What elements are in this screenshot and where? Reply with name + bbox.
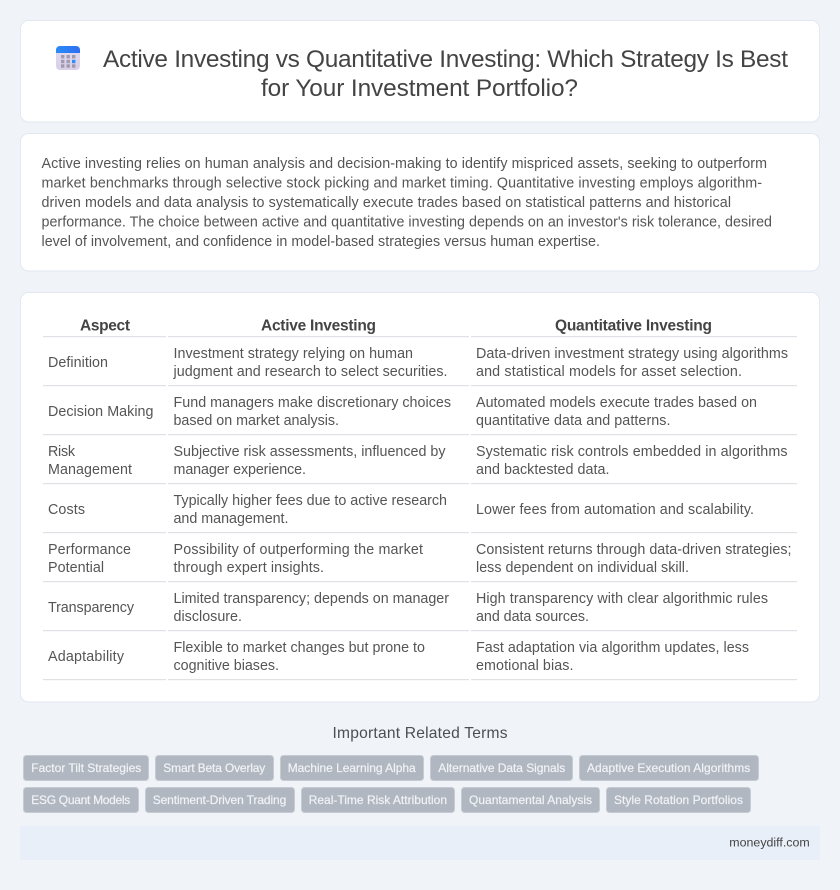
intro text: level of involvement, and confidence in model-based strategies versus human expertise. — [42, 234, 600, 250]
related terms heading: Important Related Terms — [332, 725, 508, 742]
row: decision making — [48, 395, 757, 429]
row: costs — [48, 493, 754, 527]
row: costs: Costs — [48, 502, 85, 518]
row: definition: judgment and research to select securities. — [172, 364, 448, 380]
tag: ESG Quant Models — [24, 788, 138, 812]
title — [103, 46, 788, 102]
table header: Aspect — [80, 318, 130, 334]
row: risk management: Management — [48, 462, 132, 478]
intro text: performance. The choice between active and quantitative investing depends on an investor's risk tolerance, desired — [42, 214, 772, 230]
row: decision making: Fund managers make discretionary choices — [174, 395, 451, 411]
row: performance potential: through expert insights. — [174, 560, 324, 576]
intro text: market benchmarks through selective stock picking and market timing. Quantitative investing employs algorithm- — [42, 176, 762, 192]
footer — [20, 826, 820, 860]
row: transparency: and data sources. — [476, 609, 589, 625]
row: risk management: Systematic risk controls embedded in algorithms — [476, 444, 788, 460]
row: risk management: and backtested data. — [476, 462, 610, 478]
row: costs: Lower fees from automation and scalability. — [476, 502, 754, 518]
row: adaptability: cognitive biases. — [174, 658, 279, 674]
row: adaptability: Flexible to market changes but prone to — [174, 640, 425, 656]
tag: Real-Time Risk Attribution — [302, 788, 454, 812]
table header: Quantitative Investing — [555, 318, 712, 334]
panel: header — [20, 20, 820, 122]
intro text: driven models and data analysis to systematically execute trades based on statistical patterns and historical — [42, 195, 731, 211]
tag: Machine Learning Alpha — [280, 756, 424, 780]
row: performance potential — [48, 542, 792, 576]
row: performance potential: Performance — [48, 542, 131, 558]
tag: Adaptive Execution Algorithms: Adaptive Execution Algorithms — [587, 761, 750, 775]
panel: introduction — [20, 134, 820, 271]
row: adaptability: emotional bias. — [476, 658, 574, 674]
row: transparency — [48, 591, 768, 625]
row: definition: Investment strategy relying on human — [174, 346, 413, 362]
row: risk management: Risk — [48, 444, 76, 460]
row: decision making: Automated models execute trades based on — [476, 395, 757, 411]
row: definition — [48, 346, 788, 380]
intro text: Active investing relies on human analysis and decision-making to identify mispriced assets, seeking to outperform — [42, 156, 767, 172]
title: Active Investing vs Quantitative Investing: Which Strategy Is Best — [103, 46, 788, 73]
row: definition: and statistical models for asset selection. — [476, 364, 742, 380]
row: transparency: Transparency — [48, 600, 135, 616]
row: costs: and management. — [174, 511, 288, 527]
tag: Machine Learning Alpha: Machine Learning Alpha — [288, 761, 416, 775]
row: performance potential: less dependent on individual skill. — [476, 560, 689, 576]
row: performance potential: Potential — [48, 560, 104, 576]
tag: Alternative Data Signals: Alternative Data Signals — [438, 761, 565, 775]
row: adaptability: Adaptability — [48, 649, 125, 665]
tag: Adaptive Execution Algorithms — [580, 756, 758, 780]
row: risk management: manager experience. — [174, 462, 306, 478]
row: decision making: quantitative data and patterns. — [476, 413, 670, 429]
row: transparency: disclosure. — [174, 609, 242, 625]
row: performance potential: Consistent returns through data-driven strategies; — [476, 542, 792, 558]
row: definition: Data-driven investment strategy using algorithms — [476, 346, 788, 362]
row: risk management — [48, 444, 788, 478]
tag: Quantamental Analysis — [462, 788, 600, 812]
table header: Active Investing — [261, 318, 376, 334]
row: performance potential: Possibility of outperforming the market — [174, 542, 423, 558]
tag: Sentiment-Driven Trading — [146, 788, 294, 812]
row: adaptability: Fast adaptation via algorithm updates, less — [476, 640, 749, 656]
intro text — [42, 156, 772, 250]
tag: Smart Beta Overlay: Smart Beta Overlay — [163, 761, 265, 775]
tag: Style Rotation Portfolios — [606, 788, 750, 812]
icon: calendar — [56, 46, 80, 70]
tag: ESG Quant Models: ESG Quant Models — [31, 793, 130, 807]
row: risk management: Subjective risk assessments, influenced by — [174, 444, 446, 460]
tag: Smart Beta Overlay — [156, 756, 274, 780]
panel: comparison table — [20, 292, 820, 702]
tag: Quantamental Analysis: Quantamental Analysis — [469, 793, 592, 807]
row: decision making: based on market analysis. — [174, 413, 339, 429]
footer: moneydiff.com — [729, 836, 810, 850]
tag: Factor Tilt Strategies — [24, 756, 148, 780]
tag: Style Rotation Portfolios: Style Rotation Portfolios — [614, 793, 743, 807]
title: for Your Investment Portfolio? — [261, 75, 578, 102]
related terms tags — [24, 756, 758, 812]
tag: Factor Tilt Strategies: Factor Tilt Strategies — [31, 761, 141, 775]
tag: Alternative Data Signals — [430, 756, 572, 780]
row: costs: Typically higher fees due to active research — [174, 493, 447, 509]
row: adaptability — [48, 640, 749, 674]
row: transparency: High transparency with clear algorithmic rules — [476, 591, 768, 607]
tag: Real-Time Risk Attribution: Real-Time Risk Attribution — [309, 793, 447, 807]
row: transparency: Limited transparency; depends on manager — [174, 591, 449, 607]
row: decision making: Decision Making — [48, 404, 154, 420]
table header — [80, 318, 712, 334]
row: definition: Definition — [48, 355, 108, 371]
tag: Sentiment-Driven Trading: Sentiment-Driven Trading — [153, 793, 286, 807]
